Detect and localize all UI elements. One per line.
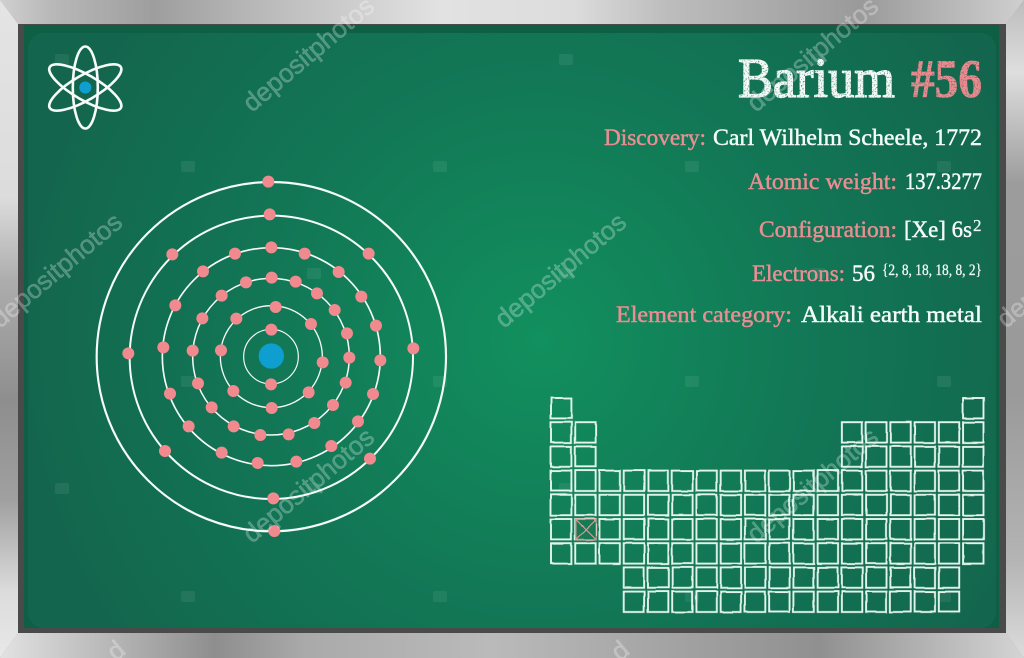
- text: configuration: [Xe] 6s: [904, 217, 972, 242]
- highlighted barium cell: [576, 519, 596, 540]
- text: configuration: [759, 216, 982, 242]
- watermarks: depositphotos: [741, 422, 884, 549]
- chart: periodic table grid: [549, 396, 985, 614]
- table cells: [549, 396, 985, 614]
- text: element category: [616, 302, 982, 327]
- watermarks: depositphotos: [237, 422, 380, 549]
- text: electrons: {2, 8, 18, 18, 8, 2}: [882, 262, 982, 279]
- text: discovery: Carl Wilhelm Scheele, 1772: [713, 125, 982, 150]
- icon: atom: [44, 46, 127, 128]
- electrons: [122, 176, 419, 537]
- text: configuration: Configuration:: [759, 217, 897, 242]
- text: electrons: [752, 261, 982, 286]
- text: electrons: Electrons:: [752, 261, 845, 286]
- text: discovery: [604, 125, 982, 150]
- text: atomic weight: 137.3277: [905, 169, 982, 194]
- watermarks: depositphotos: [489, 207, 632, 334]
- text: discovery: Discovery:: [604, 125, 706, 150]
- text: configuration: 2: [973, 216, 982, 235]
- text: element category: Alkali earth metal: [801, 302, 982, 327]
- chart: Bohr electron shell diagram: [97, 176, 446, 537]
- heading: Barium #56: [738, 48, 982, 110]
- nucleus: [259, 343, 284, 369]
- electron shell rings: [97, 182, 446, 531]
- heading: Barium #56: Barium: [738, 48, 895, 110]
- watermark camera icons: [55, 54, 951, 602]
- heading: Barium #56: #56: [911, 49, 982, 109]
- text: atomic weight: Atomic weight:: [748, 169, 897, 194]
- text: electrons: 56: [852, 261, 875, 286]
- text: atomic weight: [748, 169, 982, 194]
- text: element category: Element category:: [616, 302, 792, 327]
